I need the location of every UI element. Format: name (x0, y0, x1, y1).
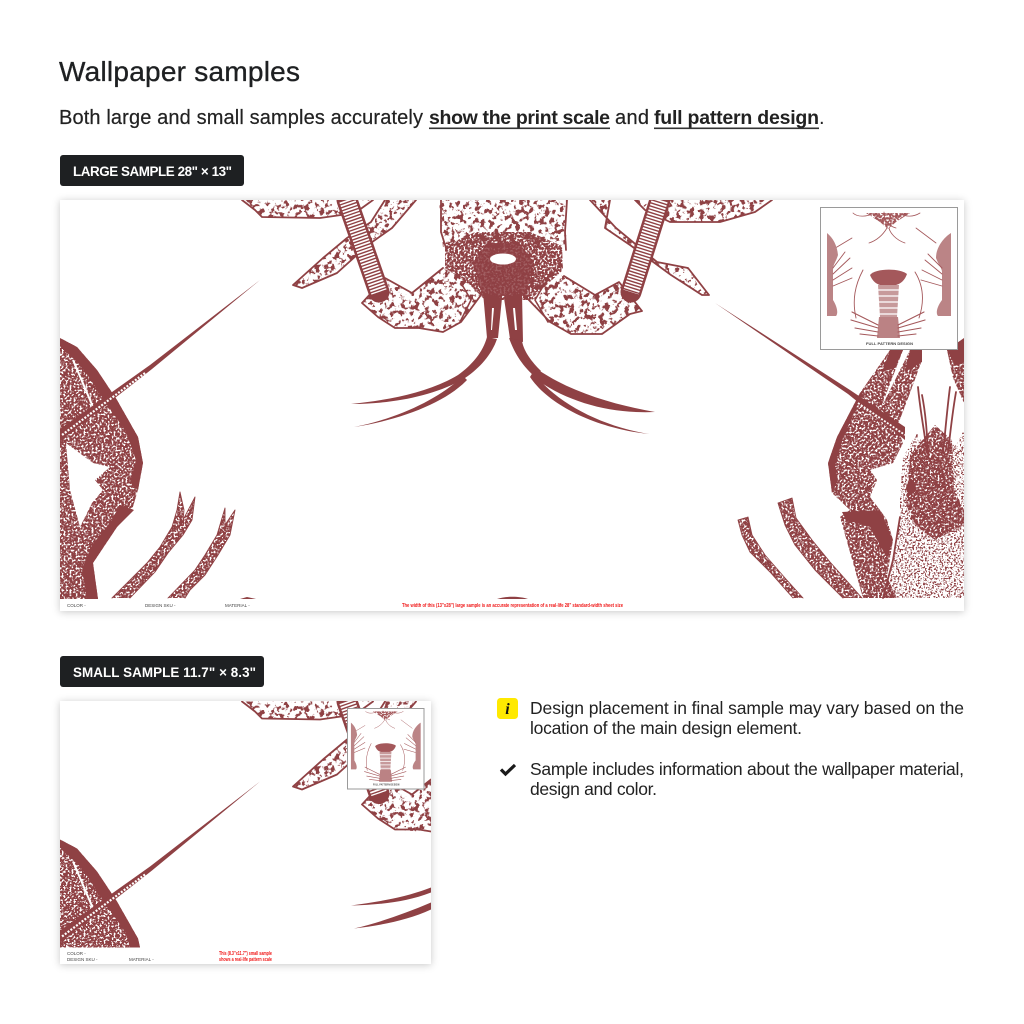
sample footer labels: DESIGN SKU - (145, 603, 176, 608)
subtitle (59, 107, 825, 129)
subtitle: Both large and small samples accurately (59, 107, 423, 129)
badge: small sample: SMALL SAMPLE 11.7" × 8.3" (73, 665, 256, 680)
text: sample information note: design and color. (530, 779, 657, 799)
subtitle: full pattern design (654, 107, 819, 129)
text: placement note: location of the main design element. (530, 718, 802, 738)
subtitle: show the print scale (429, 107, 610, 129)
sample footer labels, small: shows a real-life pattern scale (219, 957, 272, 963)
subtitle: . (819, 107, 825, 129)
sample footer labels, small: COLOR - (67, 951, 86, 956)
badge: large sample: LARGE SAMPLE 28" × 13" (73, 164, 232, 179)
lobster illustration, small (60, 702, 431, 948)
icon: info: i (505, 701, 510, 718)
sample footer labels: MATERIAL - (225, 603, 250, 608)
sample footer labels: COLOR - (67, 603, 86, 608)
sample footer labels, small: DESIGN SKU - (67, 957, 98, 962)
subtitle: and (615, 107, 649, 129)
text: sample information note: Sample includes information about the wallpaper material, (530, 759, 964, 779)
sample footer labels (67, 603, 623, 609)
icon: info (497, 698, 518, 719)
sample footer labels: The width of this (13"x28") large sample is an accurate representation of a real-life 28" standard-width sheet size (402, 603, 623, 609)
text: sample information note (530, 759, 964, 799)
sample footer labels, small (67, 951, 272, 963)
sample footer labels, small: MATERIAL - (129, 957, 154, 962)
inset: full pattern design, small (348, 708, 424, 789)
text: placement note (530, 698, 964, 738)
panel: large sample (60, 200, 964, 611)
badge: large sample (60, 155, 244, 186)
lobster illustration, large (60, 200, 964, 774)
badge: small sample (60, 656, 264, 687)
panel: small sample (60, 701, 431, 964)
title: Wallpaper samples (59, 56, 300, 87)
inset: full pattern design (820, 208, 958, 350)
sample footer labels, small: This (8.3"x11.7") small sample (219, 951, 272, 957)
text: placement note: Design placement in final sample may vary based on the (530, 698, 964, 718)
icon: check (501, 765, 515, 774)
